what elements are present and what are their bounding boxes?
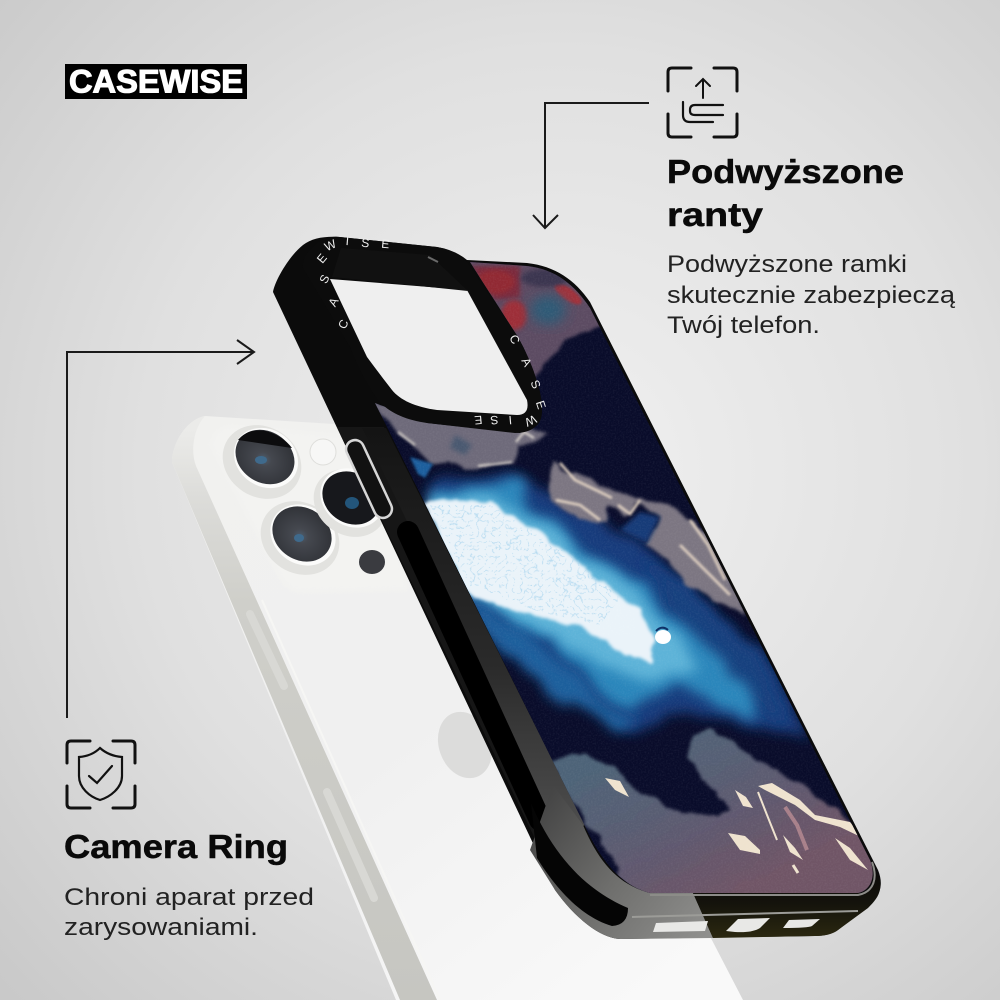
text: raised edges description: skutecznie zabezpieczą (667, 282, 956, 309)
ring lettering: S (490, 413, 499, 427)
ring lettering: E (381, 237, 390, 251)
white phone (172, 410, 743, 1000)
volume button (343, 437, 395, 521)
ring lettering (314, 234, 549, 430)
ring lettering: E (314, 251, 330, 266)
text: raised edges description: Twój telefon. (667, 312, 820, 339)
art: deep blue zones (425, 475, 810, 740)
outer wall (337, 427, 583, 870)
heading: Podwyższone ranty (667, 153, 904, 233)
camera lenses (209, 410, 399, 590)
ring lettering: E (533, 399, 549, 411)
ring lettering: S (316, 272, 333, 286)
art: inner light halo (427, 495, 700, 680)
black phone case (273, 237, 881, 939)
ring lettering: C (335, 317, 352, 331)
art: upper left marble (370, 400, 545, 478)
text: raised edges description: Podwyższone ramki (667, 251, 907, 278)
side buttons (250, 614, 374, 898)
ring opening (330, 279, 528, 415)
heading: Camera Ring: Camera Ring (64, 828, 288, 865)
ring lettering: W (322, 236, 339, 254)
edge highlight (262, 600, 440, 1000)
heading: Podwyższone ranty: Podwyższone (667, 153, 904, 190)
ring lettering: E (474, 413, 483, 427)
bottom dark section (693, 868, 880, 938)
arrow: camera ring (67, 340, 254, 718)
phone body (172, 416, 743, 1000)
art: island (548, 463, 747, 613)
ring lettering: I (508, 413, 513, 427)
heading: Podwyższone ranty: ranty (667, 196, 764, 233)
text: raised edges description (667, 251, 956, 339)
logo: CASEWISE: CASEWISE (69, 64, 243, 100)
rim next to artwork (362, 428, 585, 838)
ring lettering: I (345, 234, 350, 248)
art: top red marble (470, 262, 600, 378)
arrow: raised edges (533, 103, 649, 228)
case artwork (375, 262, 873, 893)
ring lettering: A (518, 355, 535, 369)
gray corner frame (530, 785, 713, 939)
side slot (408, 532, 540, 820)
ring lettering: W (522, 412, 539, 430)
ring inner highlight (428, 257, 438, 262)
camera plateau (210, 426, 408, 592)
text: camera ring description (64, 884, 314, 941)
bezel highlight (650, 862, 875, 895)
ring lettering: S (361, 236, 370, 250)
ring lettering: C (506, 332, 523, 346)
case body (273, 237, 881, 939)
text: camera ring description: Chroni aparat przed (64, 884, 314, 911)
art: blue halo (427, 483, 757, 720)
apple logo shadow (429, 704, 501, 786)
corner hollow (531, 803, 628, 926)
ring frame (303, 237, 542, 433)
art: texture (384, 263, 867, 892)
art: bottom marble (552, 726, 873, 893)
charging ports (653, 918, 820, 932)
icon: camera ring shield (67, 741, 135, 808)
art: white lake (423, 497, 671, 663)
ring inner wall (332, 248, 468, 291)
art: lake shadow band (468, 595, 640, 730)
text: camera ring description: zarysowaniami. (64, 914, 258, 941)
ring lettering: A (325, 295, 342, 309)
ring lettering: S (528, 378, 544, 391)
icon: raised edge (668, 68, 737, 137)
camera ring (303, 234, 549, 433)
bottom highlight stripe (632, 911, 858, 917)
phone side edge (172, 416, 437, 1000)
